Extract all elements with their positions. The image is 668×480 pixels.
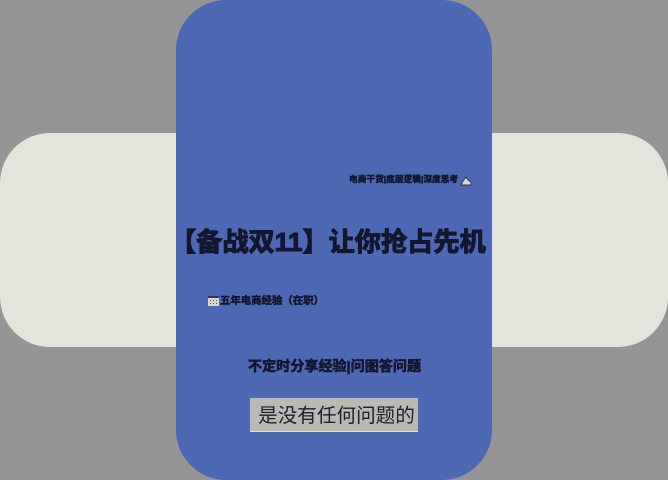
panel: pale horizontal band (0, 133, 668, 347)
title: 【备战双11】让你抢占先机 (170, 227, 486, 257)
icon: calendar emoji (208, 296, 219, 306)
icon: small cloud emoji (460, 176, 472, 186)
text: topic tagline: 电商干货|底层逻辑|深度思考 (349, 174, 458, 184)
text: sharing line: 不定时分享经验|问图答问题 (248, 358, 421, 374)
text: experience line: 五年电商经验（在职） (220, 296, 324, 307)
panel: blue vertical card (176, 0, 492, 480)
button: question prompt: 是没有任何问题的 (258, 405, 415, 427)
button: question prompt (250, 398, 418, 432)
